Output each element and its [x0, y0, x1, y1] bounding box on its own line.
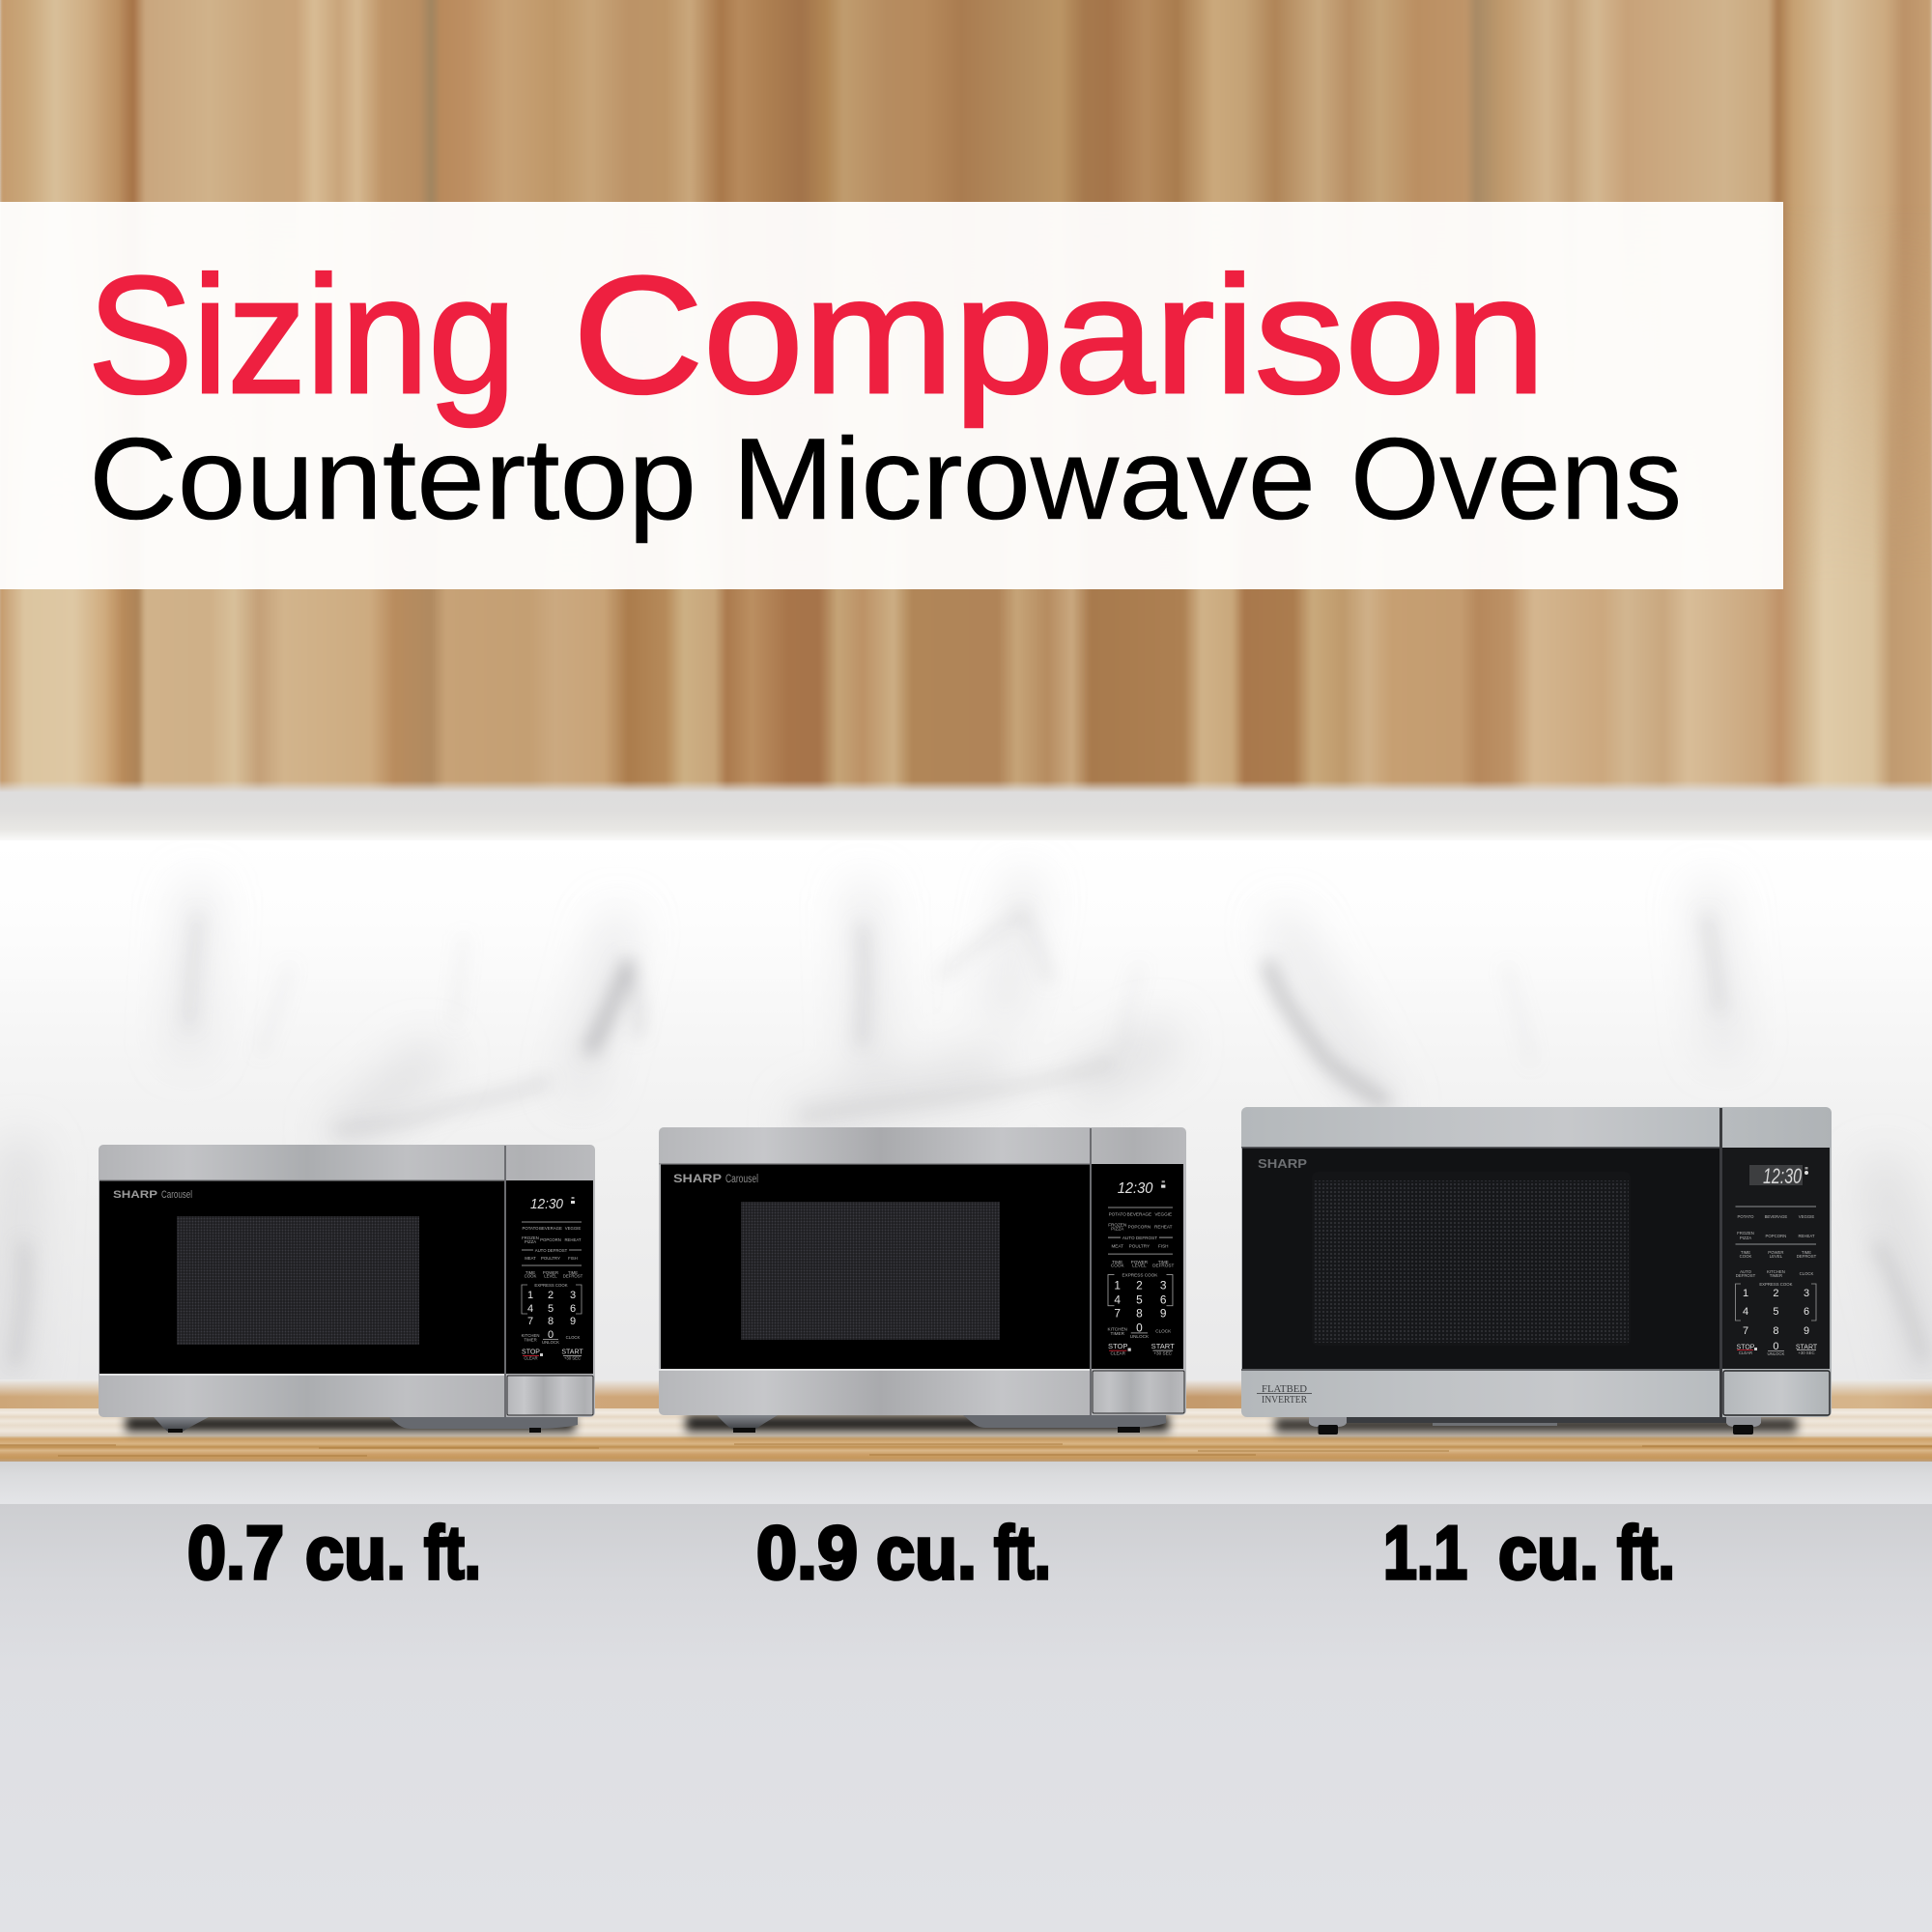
control panel labels: 2 [1136, 1279, 1143, 1293]
control panel labels: PIZZA [525, 1239, 536, 1244]
control panel labels: 6 [1804, 1306, 1809, 1318]
control panel labels: 0 [1773, 1341, 1778, 1352]
control panel labels: 3 [570, 1290, 576, 1301]
control panel labels: POWER [1768, 1250, 1784, 1255]
black door [99, 1180, 504, 1374]
door seam [1719, 1108, 1722, 1417]
control panel labels: EXPRESS COOK [1122, 1273, 1158, 1278]
control panel labels: TIME [568, 1270, 578, 1275]
control panel labels: 6 [1160, 1293, 1167, 1306]
control panel labels: COOK [1111, 1264, 1124, 1268]
oven window [741, 1202, 1000, 1340]
control panel labels: 1 [1114, 1279, 1121, 1293]
control panel labels: FROZEN [522, 1236, 539, 1240]
title: Sizing Comparison [88, 242, 1546, 428]
title: Sizing Comparison: Sizing [88, 242, 516, 428]
background: lower wood wall [0, 321, 1932, 790]
control panel labels: POTATO [1109, 1212, 1126, 1217]
steel body [1241, 1107, 1832, 1417]
background: wooden backsplash strip [0, 1379, 1932, 1410]
control panel labels: FISH [1158, 1244, 1169, 1249]
shadow [126, 1416, 575, 1432]
control panel labels: VEGGIE [1154, 1212, 1172, 1217]
steel pocket [1093, 1371, 1184, 1413]
control panel labels: FROZEN [1737, 1231, 1754, 1236]
feet and base [717, 1415, 1166, 1433]
oven window [177, 1216, 419, 1345]
background: pale soffit band [0, 781, 1932, 850]
control panel labels: REHEAT [1154, 1224, 1173, 1229]
control panel labels: POULTRY [541, 1256, 560, 1261]
control panel labels: 7 [527, 1316, 533, 1327]
lower grey floor [0, 1504, 1932, 1932]
control panel labels: PIZZA [1111, 1227, 1124, 1232]
control panel labels: 1 [1743, 1288, 1748, 1299]
control panel background [1092, 1164, 1183, 1369]
control panel labels: 9 [570, 1316, 576, 1327]
control panel labels: AUTO DEFROST [535, 1248, 568, 1253]
control panel background [506, 1180, 593, 1374]
control panel labels: POTATO [1738, 1214, 1754, 1219]
control panel labels: KITCHEN [1767, 1269, 1785, 1274]
capacity label 0.7 cu. ft.: cu. [305, 1510, 406, 1595]
control panel labels: 8 [1773, 1325, 1778, 1337]
control panel labels: POWER [1131, 1260, 1149, 1264]
control panel labels: COOK [1740, 1254, 1751, 1259]
microwave 1.1 cu. ft. [1241, 1107, 1832, 1435]
Carousel logo: Carousel [161, 1189, 192, 1201]
background: marble backsplash [0, 840, 1932, 1410]
capacity label 1.1 cu. ft.: 1.1 [1383, 1510, 1467, 1595]
capacity label 0.7 cu. ft.: ft. [424, 1510, 481, 1595]
control panel labels: 12:30 [530, 1196, 564, 1212]
control panel labels: POWER [543, 1270, 558, 1275]
control panel labels: REHEAT [1798, 1234, 1815, 1238]
control panel labels: STOP [1108, 1342, 1127, 1350]
control panel labels: LEVEL [1770, 1254, 1783, 1259]
control panel labels: POPCORN [540, 1237, 561, 1242]
control panel labels: 12:30 [1763, 1164, 1803, 1188]
control panel labels: BEVERAGE [1765, 1214, 1787, 1219]
control panel labels: 2 [548, 1290, 554, 1301]
control panel labels: DEFROST [563, 1273, 583, 1279]
control panel labels: POPCORN [1766, 1234, 1786, 1238]
SHARP logo: SHARP [113, 1189, 157, 1201]
control panel labels: TIMER [524, 1337, 537, 1343]
microwave 0.7 cu. ft. [99, 1145, 595, 1433]
capacity label 1.1 cu. ft.: ft. [1617, 1510, 1675, 1595]
steel body [99, 1145, 595, 1417]
control panel labels: BEVERAGE [1127, 1212, 1151, 1217]
control panel labels: CLEAR [1111, 1350, 1126, 1355]
oven window [1312, 1172, 1631, 1346]
shelf top surface [0, 1408, 1932, 1436]
FLATBED INVERTER badge: INVERTER [1262, 1395, 1307, 1406]
steel pocket [1723, 1371, 1830, 1415]
shelf front edge [0, 1436, 1932, 1462]
control panel labels: 12:30 [1118, 1179, 1152, 1197]
subtitle: Countertop Microwave Ovens [89, 414, 1682, 544]
black door [1242, 1148, 1719, 1369]
control panel labels: 8 [1136, 1306, 1143, 1320]
control panel labels: BEVERAGE [539, 1226, 562, 1231]
control panel labels: REHEAT [564, 1237, 582, 1242]
control panel labels: TIME [1158, 1260, 1169, 1264]
control panel labels: 4 [527, 1303, 533, 1315]
control panel labels: TIME [1112, 1260, 1122, 1264]
subtitle: Countertop Microwave Ovens: Microwave [732, 414, 1316, 544]
control panel labels: LEVEL [544, 1273, 557, 1279]
control panel labels: TIME [1741, 1250, 1750, 1255]
control panel labels: DEFROST [1797, 1254, 1817, 1259]
control panel labels: POPCORN [1128, 1224, 1151, 1229]
control panel labels: CLOCK [1155, 1328, 1172, 1333]
control panel labels: CLEAR [1739, 1350, 1752, 1355]
control panel labels: COOK [525, 1273, 536, 1279]
microwave 0.9 cu. ft. [659, 1127, 1186, 1433]
control panel labels: 9 [1160, 1306, 1167, 1320]
door seam [504, 1146, 506, 1417]
feet and base [1309, 1410, 1761, 1435]
control panel labels: UNLOCK [542, 1340, 559, 1345]
control panel background [1722, 1148, 1830, 1369]
control panel labels: TIMER [1770, 1273, 1782, 1278]
control panel labels: START [1151, 1342, 1175, 1350]
control panel labels: FISH [568, 1256, 578, 1261]
control panel labels: KITCHEN [1108, 1326, 1127, 1331]
SHARP logo: SHARP [673, 1172, 722, 1185]
feet and base [154, 1417, 578, 1433]
control panel labels: UNLOCK [1130, 1334, 1150, 1339]
shadow [686, 1415, 1169, 1432]
control panel labels: PIZZA [1740, 1236, 1751, 1240]
control panel labels: STOP [1737, 1345, 1755, 1350]
lower grey band [0, 1462, 1932, 1504]
Carousel logo: Carousel [725, 1174, 758, 1185]
control panel labels: EXPRESS COOK [534, 1283, 568, 1288]
control panel labels: 7 [1743, 1325, 1748, 1337]
control panel labels: CLEAR [524, 1356, 538, 1360]
control panel labels: 1 [527, 1290, 533, 1301]
control panel labels: +30 SEC [564, 1356, 581, 1360]
control panel labels: 3 [1804, 1288, 1809, 1299]
control panel labels: DEFROST [1736, 1273, 1756, 1278]
control panel labels [1735, 1164, 1818, 1356]
control panel labels: +30 SEC [1153, 1350, 1173, 1355]
steel body [659, 1127, 1186, 1415]
capacity label 0.9 cu. ft.: 0.9 [756, 1510, 858, 1595]
control panel labels: UNLOCK [1767, 1351, 1784, 1356]
control panel labels: POULTRY [1129, 1244, 1150, 1249]
capacity label 0.7 cu. ft.: 0.7 [187, 1510, 284, 1595]
control panel labels: KITCHEN [522, 1333, 539, 1338]
control panel labels: START [1796, 1345, 1818, 1350]
shadow [1275, 1417, 1797, 1433]
control panel labels: AUTO DEFROST [1122, 1236, 1157, 1240]
control panel labels: +30 SEC [1798, 1350, 1815, 1355]
subtitle: Countertop Microwave Ovens: Ovens [1350, 414, 1682, 544]
control panel labels: 4 [1743, 1306, 1748, 1318]
control panel labels: 5 [1773, 1306, 1778, 1318]
control panel labels: 9 [1804, 1325, 1809, 1337]
control panel labels: 0 [1136, 1321, 1143, 1334]
control panel labels: MEAT [525, 1256, 536, 1261]
control panel labels: CLOCK [566, 1335, 581, 1340]
FLATBED INVERTER badge: FLATBED [1262, 1384, 1307, 1395]
control panel labels: AUTO [1740, 1269, 1752, 1274]
capacity label 0.9 cu. ft.: cu. [876, 1510, 977, 1595]
subtitle: Countertop Microwave Ovens: Countertop [89, 414, 696, 544]
control panel labels: 8 [548, 1316, 554, 1327]
control panel labels: VEGGIE [1799, 1214, 1814, 1219]
banner panel [0, 202, 1783, 589]
control panel labels: VEGGIE [565, 1226, 581, 1231]
control panel labels: 6 [570, 1303, 576, 1315]
control panel labels: 3 [1160, 1279, 1167, 1293]
SHARP logo: SHARP [1258, 1156, 1307, 1171]
control panel labels: CLOCK [1800, 1271, 1814, 1276]
control panel labels [522, 1196, 583, 1360]
door seam [1090, 1128, 1092, 1415]
control panel labels: 7 [1114, 1306, 1121, 1320]
control panel labels: MEAT [1111, 1244, 1123, 1249]
control panel labels: 5 [548, 1303, 554, 1315]
control panel labels: POTATO [523, 1226, 539, 1231]
black door [661, 1164, 1091, 1369]
FLATBED INVERTER badge [1257, 1384, 1312, 1406]
control panel labels: 2 [1773, 1288, 1778, 1299]
control panel labels: 5 [1136, 1293, 1143, 1306]
capacity label 0.7 cu. ft. [187, 1510, 481, 1595]
capacity label 1.1 cu. ft.: cu. [1498, 1510, 1599, 1595]
background: upper wood wall [0, 0, 1932, 798]
control panel labels: STOP [522, 1349, 540, 1356]
capacity label 0.9 cu. ft.: ft. [994, 1510, 1051, 1595]
control panel labels: 4 [1114, 1293, 1121, 1306]
title: Sizing Comparison: Comparison [573, 242, 1546, 428]
control panel labels: 0 [548, 1329, 554, 1341]
capacity label 0.9 cu. ft. [756, 1510, 1051, 1595]
control panel labels: TIME [1802, 1250, 1811, 1255]
steel pocket [507, 1376, 593, 1415]
capacity label 1.1 cu. ft. [1383, 1510, 1675, 1595]
control panel labels: TIME [526, 1270, 535, 1275]
control panel labels: EXPRESS COOK [1759, 1282, 1793, 1287]
control panel labels [1108, 1179, 1175, 1355]
control panel labels: FROZEN [1108, 1222, 1126, 1227]
control panel labels: DEFROST [1152, 1264, 1174, 1268]
control panel labels: LEVEL [1132, 1264, 1147, 1268]
control panel labels: TIMER [1111, 1331, 1125, 1336]
control panel labels: START [561, 1349, 583, 1356]
